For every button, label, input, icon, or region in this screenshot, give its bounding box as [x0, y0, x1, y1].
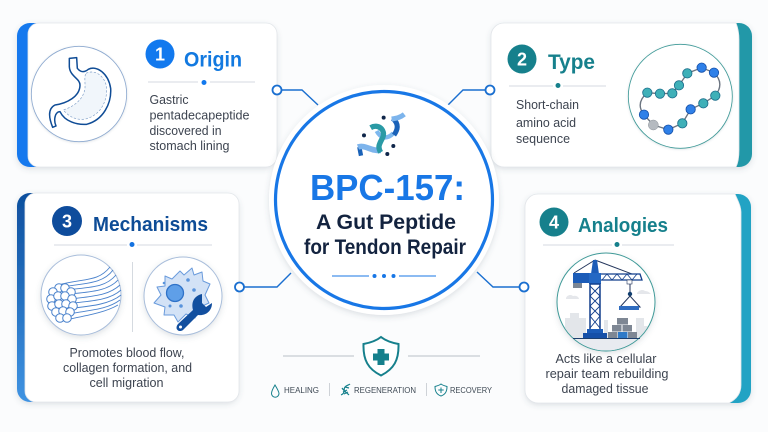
- badge 2: 2: [517, 50, 527, 70]
- icon: shield: [363, 337, 399, 376]
- icon: tendon fibers: [41, 255, 121, 335]
- badge 4: 4: [549, 212, 559, 232]
- icon: cell and wrench: [144, 257, 222, 335]
- text: type: amino acid: [516, 116, 576, 130]
- connector nodes: [235, 86, 528, 292]
- text: analogies: [546, 352, 669, 396]
- panel: origin: [17, 23, 277, 167]
- text: type: Short-chain: [516, 98, 579, 112]
- text: analogies: Acts like a cellular: [556, 352, 656, 366]
- text: origin: Gastric: [150, 93, 188, 107]
- subtitle: A Gut Peptide: [316, 211, 456, 234]
- heading: mechanisms: Mechanisms: [93, 214, 208, 236]
- title: BPC-157: BPC-157:: [310, 167, 465, 208]
- heading: type: Type: [548, 51, 595, 74]
- icon: dna helix: [358, 114, 404, 156]
- subtitle: [304, 211, 466, 259]
- badge 3: [52, 206, 82, 236]
- legend: recovery: RECOVERY: [450, 385, 492, 395]
- icon: amino acid chain: [628, 44, 732, 148]
- text: type: sequence: [516, 132, 570, 146]
- badge 2: [508, 44, 536, 74]
- panel: mechanisms: [17, 193, 239, 402]
- legend: healing: [272, 385, 319, 397]
- icon: construction crane: [555, 253, 657, 352]
- legend: regeneration: REGENERATION: [354, 385, 416, 395]
- badge 3: 3: [62, 212, 72, 232]
- icon: stomach: [31, 46, 127, 142]
- text: origin: [150, 93, 250, 153]
- legend: recovery: [435, 384, 492, 396]
- panel: analogies: [525, 194, 751, 403]
- text: mechanisms: cell migration: [90, 376, 164, 390]
- text: origin: discovered in: [150, 124, 222, 138]
- subtitle: for Tendon Repair: [304, 236, 466, 259]
- badge 4: [540, 208, 568, 236]
- badge 1: 1: [155, 44, 165, 64]
- text: origin: stomach lining: [150, 139, 230, 153]
- badge 1: [146, 40, 174, 68]
- text: mechanisms: Promotes blood flow,: [70, 346, 184, 360]
- panel: type: [491, 23, 752, 167]
- text: type: [516, 98, 579, 146]
- central hub circle: [269, 85, 499, 315]
- connectors: [244, 90, 520, 287]
- text: mechanisms: collagen formation, and: [63, 361, 192, 375]
- text: analogies: damaged tissue: [562, 382, 649, 396]
- heading: analogies: Analogies: [578, 215, 668, 237]
- heading: origin: Origin: [184, 48, 242, 72]
- legend: healing: HEALING: [284, 385, 319, 395]
- text: origin: pentadecapeptide: [150, 108, 250, 122]
- text: mechanisms: [63, 346, 192, 390]
- text: analogies: repair team rebuilding: [546, 367, 669, 381]
